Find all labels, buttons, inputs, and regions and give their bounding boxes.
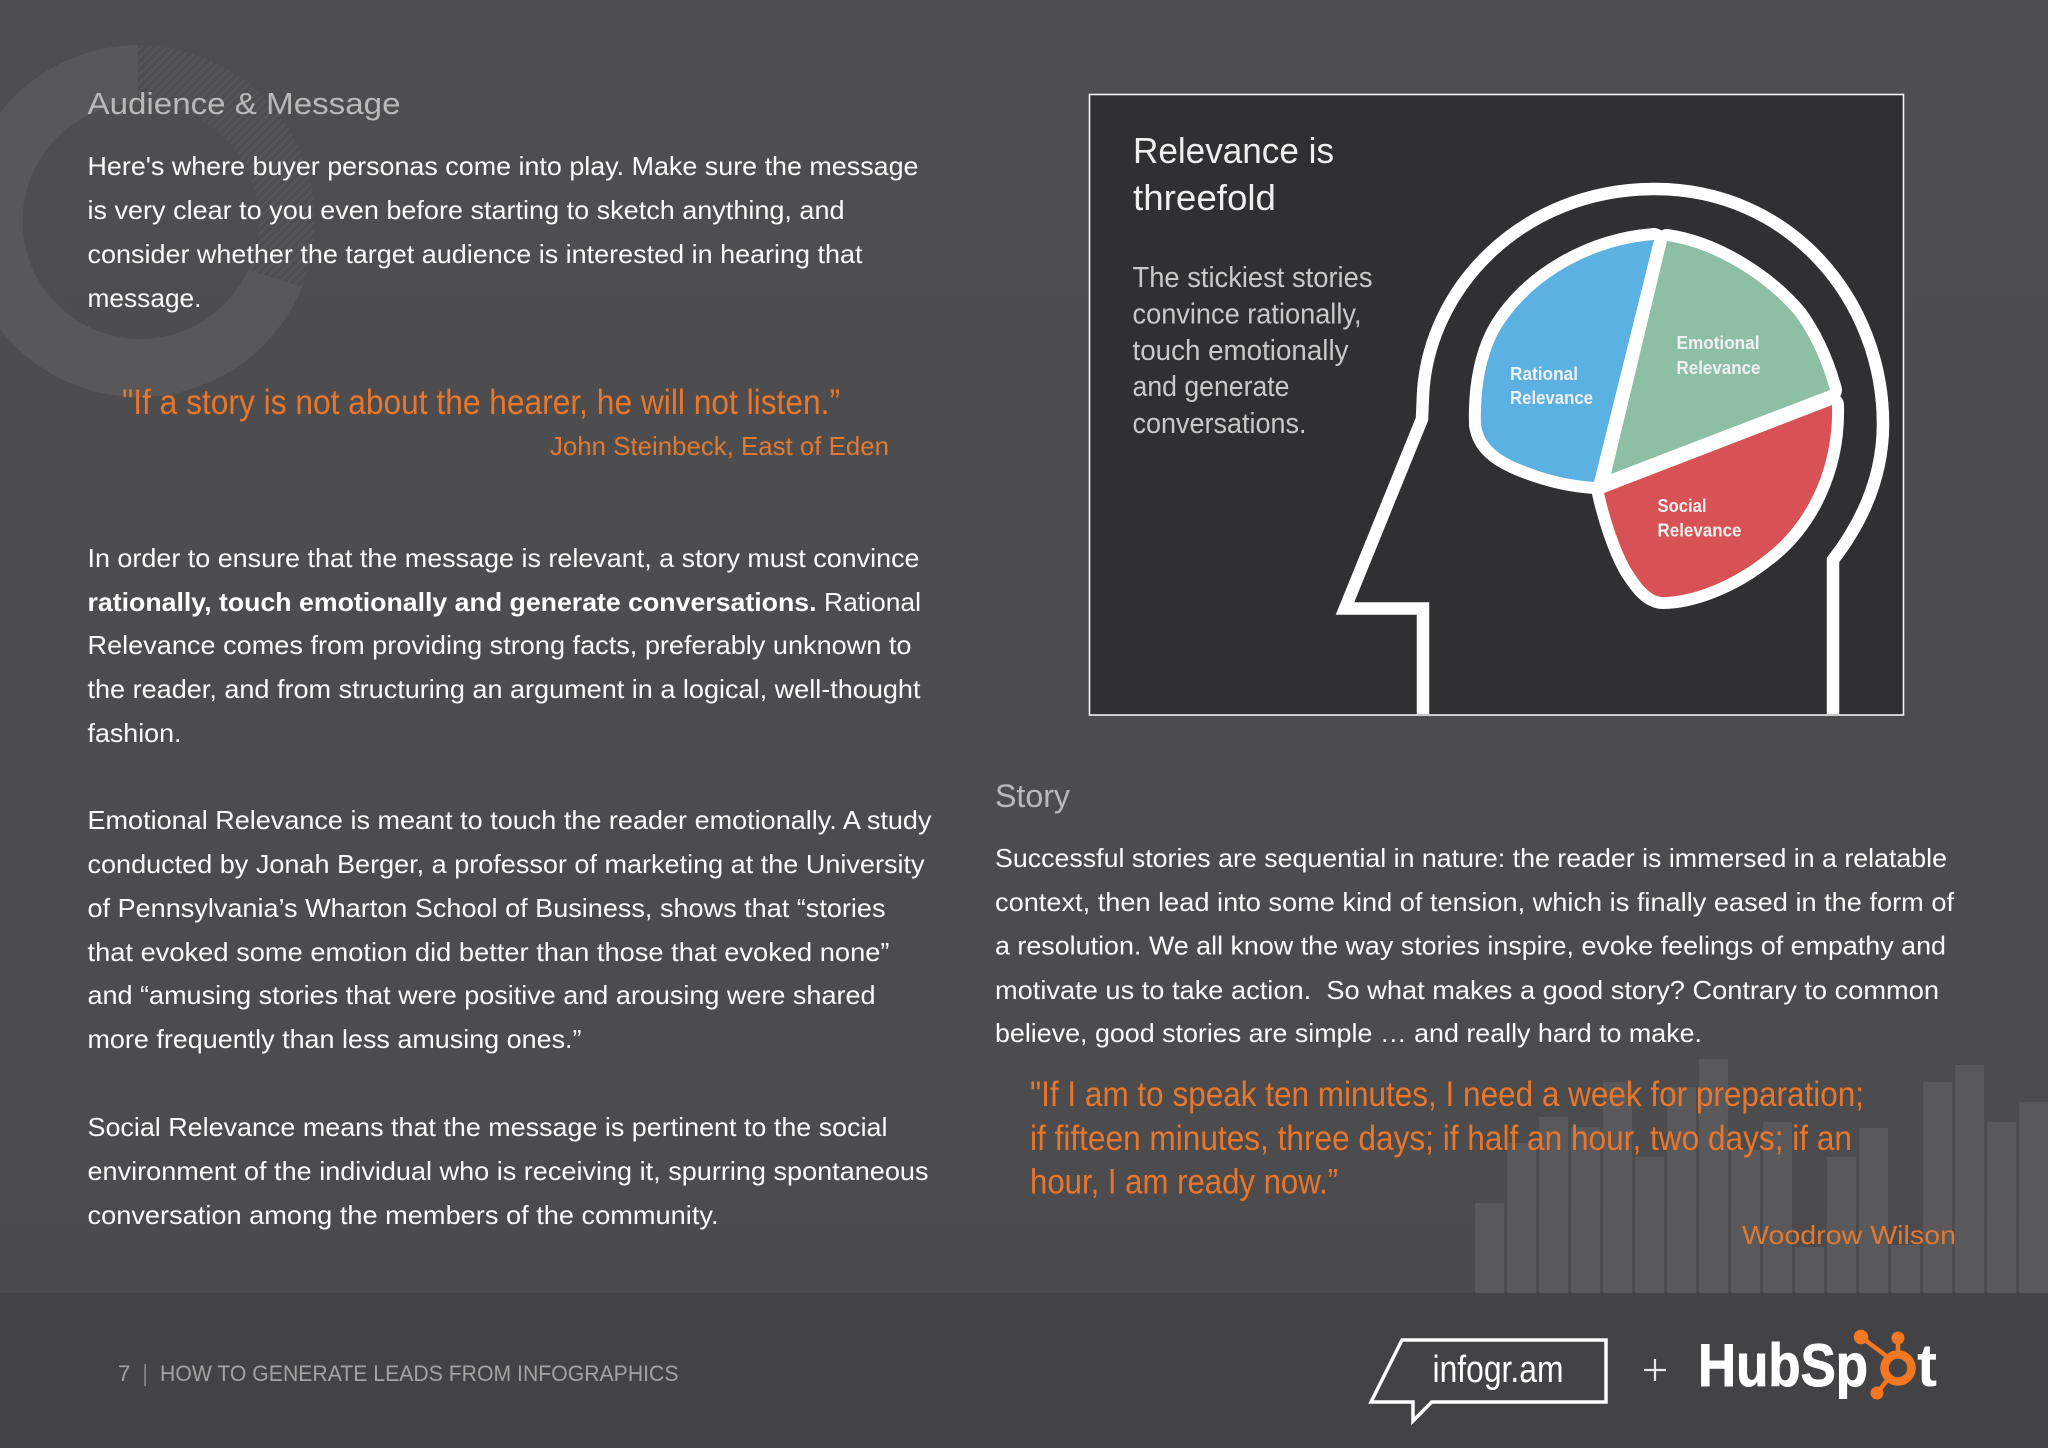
diagram description: convince rationally, bbox=[1132, 298, 1362, 330]
diagram title: threefold bbox=[1133, 177, 1276, 218]
text block: rational relevance: fashion. bbox=[88, 718, 182, 748]
plus sign bbox=[1644, 1359, 1666, 1381]
text block: emotional relevance: and “amusing stories that were positive and arousing were shared bbox=[88, 980, 876, 1010]
text block: rational relevance: the reader, and from structuring an argument in a logical, well-thought bbox=[88, 674, 921, 704]
text block: emotional relevance: more frequently than less amusing ones.” bbox=[88, 1024, 582, 1054]
quote: Woodrow Wilson: if fifteen minutes, three days; if half an hour, two days; if an bbox=[1030, 1119, 1852, 1158]
quote: Woodrow Wilson: "If I am to speak ten minutes, I need a week for preparation; bbox=[1030, 1075, 1864, 1114]
text block: emotional relevance: conducted by Jonah Berger, a professor of marketing at the University bbox=[88, 849, 924, 879]
text block: emotional relevance bbox=[88, 805, 932, 1054]
brain segment: emotional relevance: Emotional bbox=[1676, 333, 1760, 353]
text block: emotional relevance: Emotional Relevance is meant to touch the reader emotionally. A study bbox=[88, 805, 932, 835]
brain segment: social relevance: Social bbox=[1658, 496, 1706, 516]
text block: buyer personas: consider whether the target audience is interested in hearing that bbox=[88, 239, 863, 269]
brain outline bbox=[1481, 240, 1832, 597]
text block: social relevance bbox=[88, 1112, 928, 1230]
text block: buyer personas bbox=[88, 151, 919, 313]
brain segment: rational relevance bbox=[1481, 240, 1654, 482]
icon: HubSpot sprocket bbox=[1854, 1330, 1912, 1400]
quote: John Steinbeck: "If a story is not about the hearer, he will not listen.” bbox=[122, 383, 840, 422]
brain segment: social relevance: Relevance bbox=[1658, 520, 1742, 540]
text block: successful stories: Successful stories are sequential in nature: the reader is immersed in a relatable bbox=[995, 843, 1947, 873]
panel: audience and message column bbox=[88, 86, 932, 1230]
diagram title bbox=[1133, 130, 1334, 218]
footer page label: 7 bbox=[118, 1361, 130, 1386]
quote: John Steinbeck: John Steinbeck, East of Eden bbox=[550, 431, 889, 461]
text block: buyer personas: is very clear to you even before starting to sketch anything, and bbox=[88, 195, 844, 225]
text block: rational relevance: In order to ensure that the message is relevant, a story must convince bbox=[88, 543, 920, 573]
heading: story: Story bbox=[995, 778, 1070, 814]
icon: head outline bbox=[1345, 189, 1883, 714]
brain segment: emotional relevance bbox=[1611, 241, 1830, 474]
heading: audience and message: Audience & Message bbox=[88, 86, 400, 121]
panel: relevance is threefold diagram bbox=[1090, 94, 1904, 715]
text block: successful stories: context, then lead into some kind of tension, which is finally eased in the form of bbox=[995, 887, 1955, 917]
brain segment: rational relevance: Relevance bbox=[1510, 388, 1593, 408]
footer page label: HOW TO GENERATE LEADS FROM INFOGRAPHICS bbox=[160, 1361, 678, 1386]
quote: John Steinbeck bbox=[122, 383, 889, 461]
diagram description: The stickiest stories bbox=[1132, 262, 1372, 294]
text block: rational relevance bbox=[88, 543, 921, 748]
text block: successful stories: motivate us to take action. So what makes a good story? Contrary to common bbox=[995, 975, 1939, 1005]
logo: infogr.am bbox=[1371, 1340, 1606, 1421]
brain segment: social relevance bbox=[1604, 405, 1832, 597]
diagram description: and generate bbox=[1132, 371, 1290, 403]
diagram description bbox=[1132, 262, 1372, 440]
text block: social relevance: environment of the individual who is receiving it, spurring spontaneous bbox=[88, 1156, 928, 1186]
decorative bar chart bbox=[1475, 1059, 2048, 1293]
quote: Woodrow Wilson: hour, I am ready now.” bbox=[1030, 1162, 1338, 1202]
quote: Woodrow Wilson: Woodrow Wilson bbox=[1742, 1220, 1956, 1250]
text block: successful stories bbox=[995, 843, 1955, 1048]
text block: social relevance: Social Relevance means that the message is pertinent to the social bbox=[88, 1112, 888, 1142]
text block: rational relevance: Relevance comes from providing strong facts, preferably unknown to bbox=[88, 630, 911, 660]
logo: infogr.am: infogr.am bbox=[1432, 1349, 1564, 1391]
logo: HubSpot: t bbox=[1917, 1332, 1937, 1399]
diagram description: conversations. bbox=[1132, 408, 1306, 440]
text block: successful stories: believe, good stories are simple … and really hard to make. bbox=[995, 1018, 1702, 1048]
text block: emotional relevance: that evoked some emotion did better than those that evoked none” bbox=[88, 937, 890, 967]
text block: buyer personas: Here's where buyer personas come into play. Make sure the message bbox=[88, 151, 919, 181]
text block: buyer personas: message. bbox=[88, 283, 202, 313]
diagram title: Relevance is bbox=[1133, 130, 1334, 171]
brain segment: rational relevance: Rational bbox=[1510, 364, 1578, 384]
footer bar bbox=[0, 1293, 2048, 1448]
text block: social relevance: conversation among the members of the community. bbox=[88, 1200, 718, 1230]
text block: emotional relevance: of Pennsylvania’s Wharton School of Business, shows that “stories bbox=[88, 893, 886, 923]
decorative donut chart bbox=[0, 45, 315, 397]
panel: story column bbox=[995, 778, 1956, 1250]
text block: rational relevance: rationally, touch emotionally and generate conversations. bbox=[88, 587, 816, 617]
quote: Woodrow Wilson bbox=[1030, 1075, 1956, 1250]
text block: rational relevance: Rational bbox=[824, 587, 921, 617]
diagram description: touch emotionally bbox=[1132, 335, 1349, 367]
logo: HubSpot: HubSp bbox=[1698, 1332, 1868, 1399]
text block: successful stories: a resolution. We all know the way stories inspire, evoke feelings of empathy and bbox=[995, 930, 1946, 960]
brain segment: emotional relevance: Relevance bbox=[1676, 358, 1760, 378]
